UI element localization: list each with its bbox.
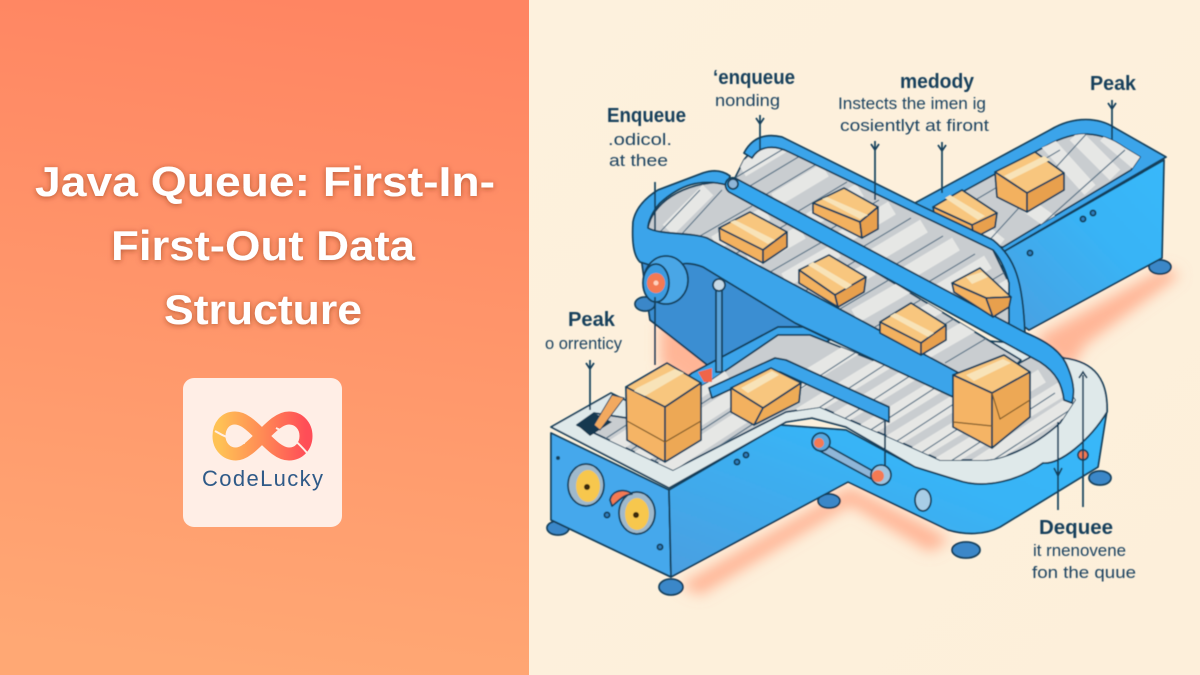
inner rail bar [709, 358, 889, 422]
belt lower [648, 182, 1021, 390]
title: Java Queue: First-In- [35, 158, 495, 205]
front-left conveyor [547, 320, 1111, 595]
back rim blue [640, 327, 830, 422]
feet [547, 471, 1111, 595]
small orange tab [698, 368, 712, 382]
band pivot [728, 179, 738, 189]
callout arrows [586, 100, 1116, 510]
logo card: CodeLucky [183, 378, 342, 527]
label: medody: cosientlyt at firont [840, 116, 989, 135]
front band [725, 178, 1073, 403]
label: peak left: o orrenticy [545, 334, 622, 353]
box [799, 255, 866, 307]
foot [635, 297, 655, 311]
box [813, 188, 878, 238]
illustration: queue conveyor [545, 67, 1180, 595]
label: dequeue [1032, 517, 1136, 582]
labels [545, 67, 1137, 582]
box [719, 212, 787, 263]
label: enqueue top: nonding [715, 91, 780, 110]
box [933, 190, 997, 238]
label: peak left: Peak [568, 309, 616, 331]
label: enqueue left: Enqueue [607, 105, 686, 127]
rim [551, 327, 1107, 488]
dark gap at left end [577, 413, 612, 436]
label: medody: medody [900, 71, 975, 93]
box [731, 368, 801, 425]
right panel background [529, 0, 1200, 675]
big box: front right [953, 355, 1030, 448]
label: enqueue top: ‘enqueue [713, 67, 795, 89]
back-right conveyor [915, 120, 1171, 330]
pivot arm [812, 433, 891, 485]
drive wheel [643, 256, 688, 304]
box [880, 303, 946, 355]
label: enqueue left: .odicol. [608, 130, 672, 149]
label: dequeue: Dequee [1039, 517, 1113, 539]
belt upper [734, 147, 1009, 323]
pole [884, 422, 886, 470]
main diagonal conveyor [633, 136, 1073, 403]
main conveyor lower body [640, 250, 830, 375]
label: medody: Instects the imen ig [838, 94, 986, 113]
label: peak top right: Peak [1090, 73, 1137, 95]
foot [1149, 260, 1171, 274]
label: dequeue: it rnenovene [1033, 541, 1126, 560]
back rail [744, 136, 1025, 335]
rollers [605, 346, 1076, 470]
floor shadows [660, 268, 1180, 595]
big box: front left [626, 363, 701, 462]
logo wordmark: CodeLucky [202, 466, 323, 491]
rollers [976, 133, 1141, 245]
icon: infinity logo [215, 418, 308, 454]
label: peak left [545, 309, 622, 353]
left panel background [0, 0, 529, 675]
pole [716, 287, 722, 372]
pole knob [713, 279, 725, 291]
inner lip [935, 134, 1140, 247]
dots [1027, 250, 1033, 256]
title: First-Out Data [111, 222, 416, 269]
title [35, 158, 495, 333]
eyes [568, 464, 655, 534]
label: medody [838, 71, 989, 135]
rim [915, 120, 1166, 252]
label: enqueue left [607, 105, 686, 170]
label: enqueue left: at thee [609, 151, 668, 170]
box [952, 268, 1011, 317]
side panel [1000, 160, 1164, 330]
belt well [577, 335, 1075, 470]
label: dequeue: fon the quue [1032, 563, 1136, 582]
box [995, 152, 1064, 212]
label: enqueue top [713, 67, 795, 110]
dots and knobs [556, 450, 1088, 550]
left end rim [633, 171, 957, 397]
side panels [551, 433, 671, 577]
title: Structure [164, 286, 362, 333]
boxes on upper belt [813, 188, 1011, 317]
boxes on lower belt [719, 212, 946, 355]
